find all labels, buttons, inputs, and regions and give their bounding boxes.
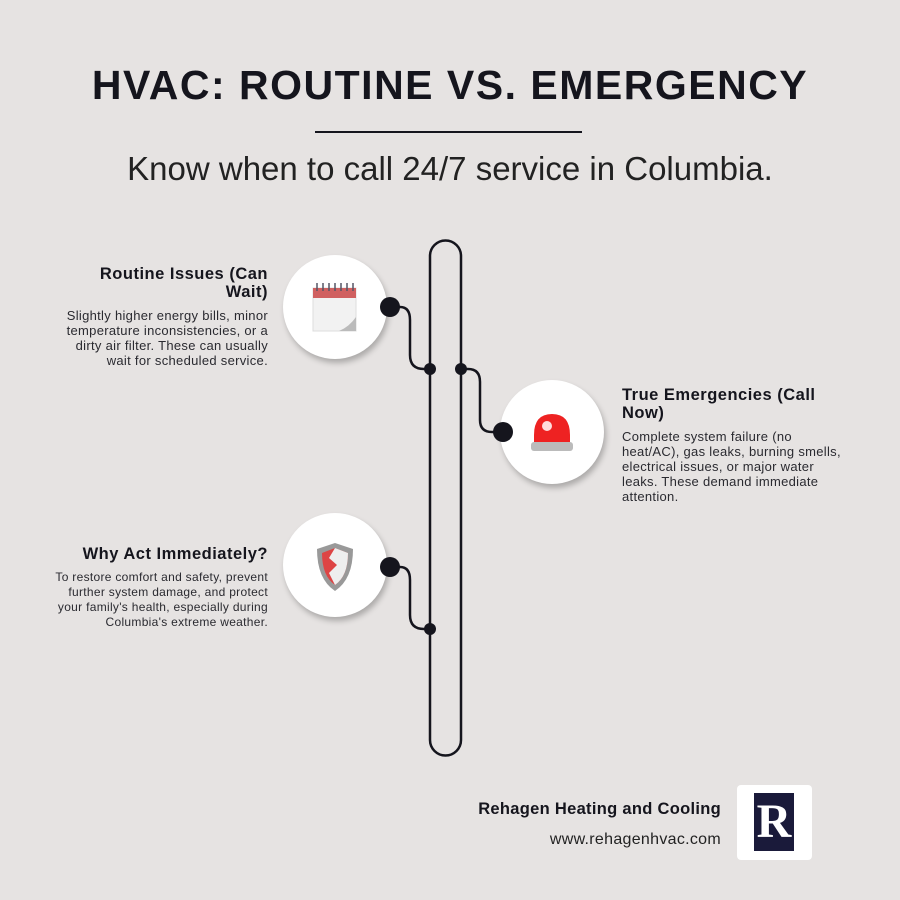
dot: why act	[380, 557, 400, 577]
divider	[315, 131, 582, 133]
dot: routine	[380, 297, 400, 317]
logo: R	[757, 795, 791, 848]
icon circle: siren	[500, 380, 604, 484]
title: HVAC: ROUTINE VS. EMERGENCY	[92, 62, 808, 108]
dot: emergency	[493, 422, 513, 442]
text: emergencies: True Emergencies (Call Now)	[622, 386, 816, 422]
footer brand: Rehagen Heating and Cooling	[478, 800, 721, 818]
text: routine	[66, 265, 268, 368]
text: routine: Slightly higher energy bills, minor temperature inconsistencies, or a dirty air filter. These can usually wait for scheduled service.	[67, 308, 268, 368]
text: why act: To restore comfort and safety, prevent further system damage, and protect your family's health, especially during Columbia's extreme weather.	[55, 570, 268, 629]
subtitle: Know when to call 24/7 service in Columbia.	[127, 150, 773, 187]
icon circle: calendar	[283, 255, 387, 359]
text: emergencies	[622, 386, 841, 504]
text: routine: Routine Issues (Can Wait)	[100, 265, 268, 301]
footer brand	[478, 800, 721, 848]
icon circle: shield	[283, 513, 387, 617]
text: emergencies: Complete system failure (no heat/AC), gas leaks, burning smells, electrical issues, or major water leaks. These demand immediate attention.	[622, 429, 841, 504]
footer brand: www.rehagenhvac.com	[550, 831, 721, 848]
text: why act: Why Act Immediately?	[83, 545, 268, 563]
logo	[737, 785, 812, 860]
